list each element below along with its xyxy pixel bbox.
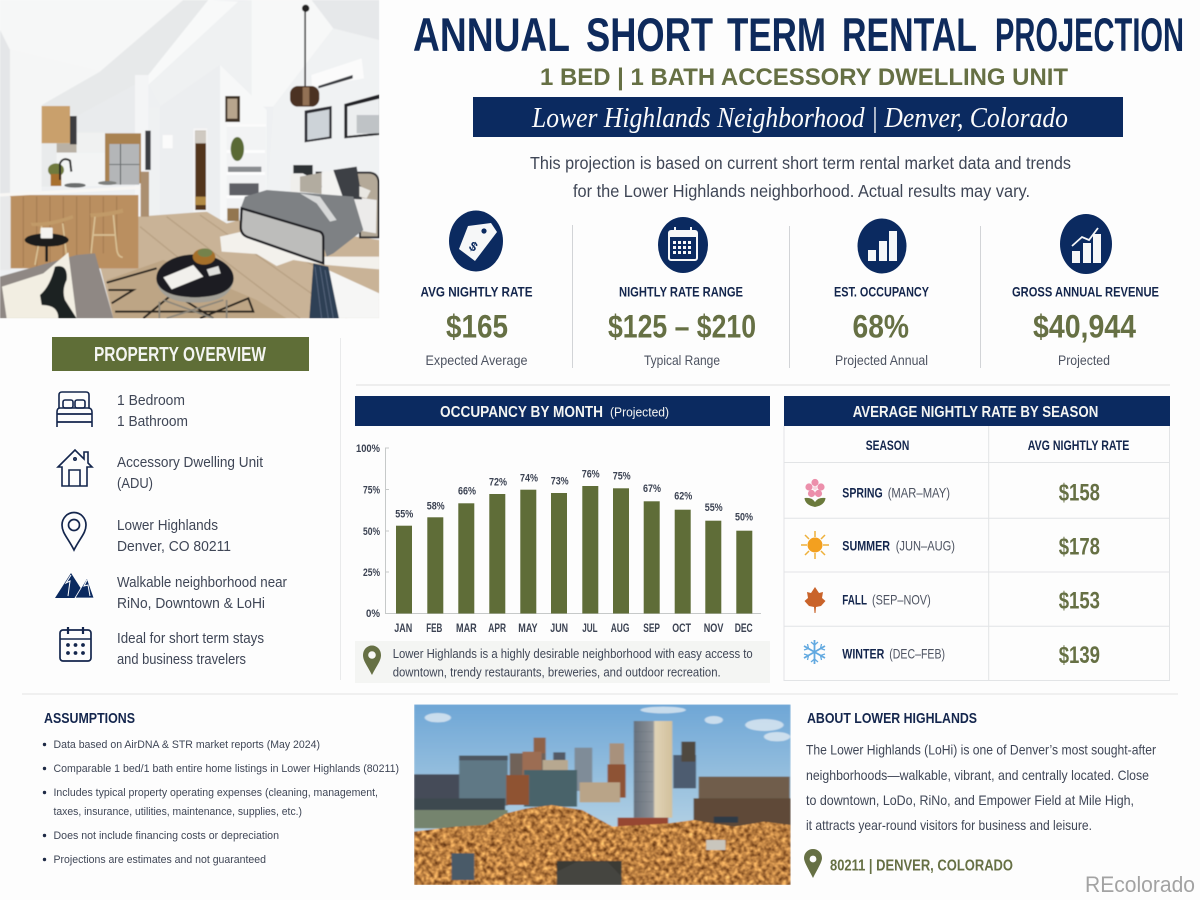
location banner: Lower Highlands Neighborhood | Denver, Colorado bbox=[531, 103, 1068, 134]
sofa and pillow bbox=[0, 253, 113, 318]
row: spring bbox=[804, 479, 1100, 507]
bar chart bbox=[356, 443, 761, 635]
bar chart: MAR bbox=[456, 621, 477, 635]
intro text bbox=[530, 153, 1071, 201]
panel: about lower highlands bbox=[804, 710, 1156, 878]
stat: nightly rate range bbox=[608, 217, 756, 368]
stat: estimated occupancy: 68% bbox=[852, 308, 909, 344]
icon: calendar bbox=[60, 627, 91, 661]
row: winter: WINTER bbox=[842, 645, 884, 661]
icon: location pin bbox=[62, 512, 86, 550]
title bbox=[413, 8, 1184, 61]
armchair bbox=[328, 270, 379, 318]
text: location: Denver, CO 80211 bbox=[117, 539, 231, 555]
stat: gross annual revenue: $40,944 bbox=[1033, 308, 1136, 344]
row: fall: FALL bbox=[842, 592, 867, 608]
bar chart: 72% bbox=[489, 476, 507, 488]
assumptions list: taxes, insurance, utilities, maintenance, supplies, etc.) bbox=[54, 806, 302, 818]
bar chart: 55% bbox=[705, 502, 723, 514]
bar chart: APR bbox=[488, 621, 506, 635]
bar chart: 75% bbox=[613, 471, 631, 483]
watermark: REcolorado bbox=[1085, 872, 1195, 897]
intro text: This projection is based on current short term rental market data and trends bbox=[530, 153, 1071, 173]
text: bedrooms: 1 Bedroom bbox=[117, 393, 185, 409]
title: ANNUAL bbox=[413, 8, 570, 61]
heading: property overview bbox=[52, 337, 309, 371]
bar chart: SEP bbox=[643, 621, 660, 635]
location banner bbox=[473, 97, 1123, 137]
assumptions list: Comparable 1 bed/1 bath entire home listings in Lower Highlands (80211) bbox=[54, 763, 399, 775]
row: spring: $158 bbox=[1059, 480, 1100, 507]
bar chart: AUG bbox=[611, 621, 629, 635]
callout: neighborhood note bbox=[355, 641, 770, 683]
autumn trees bbox=[414, 805, 791, 885]
stat: estimated occupancy bbox=[834, 218, 930, 368]
bar chart: JUN bbox=[550, 621, 568, 635]
panel: assumptions bbox=[43, 710, 399, 866]
row: summer bbox=[801, 531, 1100, 561]
counter bbox=[10, 195, 138, 268]
row: winter: $139 bbox=[1059, 642, 1100, 669]
icon: flower bbox=[804, 479, 826, 507]
text: location: Lower Highlands bbox=[117, 518, 218, 534]
stat: average nightly rate: AVG NIGHTLY RATE bbox=[420, 284, 532, 300]
about text: The Lower Highlands (LoHi) is one of Denver’s most sought-after bbox=[806, 742, 1156, 758]
icon: leaf bbox=[804, 587, 826, 613]
bar chart: 76% bbox=[582, 469, 600, 481]
assumptions list: Data based on AirDNA & STR market reports (May 2024) bbox=[54, 739, 320, 751]
text: walkability bbox=[117, 575, 287, 612]
bar chart: 58% bbox=[427, 500, 445, 512]
stat: average nightly rate: Expected Average bbox=[426, 352, 528, 368]
stat: average nightly rate bbox=[420, 210, 532, 368]
text: bedrooms bbox=[117, 393, 188, 430]
stat: average nightly rate: $165 bbox=[446, 308, 508, 344]
bar chart: 25% bbox=[363, 567, 380, 579]
text: bedrooms: 1 Bathroom bbox=[117, 414, 188, 430]
pendant lamp bbox=[304, 7, 306, 87]
icon: bar chart bbox=[858, 218, 906, 274]
bar chart: 50% bbox=[363, 526, 380, 538]
callout: neighborhood note: downtown, trendy restaurants, breweries, and outdoor recreation. bbox=[393, 666, 721, 680]
kitchen bbox=[42, 106, 70, 143]
bar chart: 75% bbox=[363, 484, 380, 496]
assumptions list bbox=[43, 739, 399, 866]
bar chart: 67% bbox=[643, 483, 661, 495]
heading: occupancy by month: (Projected) bbox=[610, 404, 669, 420]
heading: property overview: PROPERTY OVERVIEW bbox=[94, 344, 266, 366]
photo: apartment interior bbox=[0, 0, 379, 318]
callout: neighborhood note: Lower Highlands is a highly desirable neighborhood with easy access to bbox=[393, 647, 753, 661]
bar chart: MAY bbox=[518, 621, 538, 635]
row: spring: SPRING bbox=[842, 484, 883, 500]
icon: price tag bbox=[449, 210, 503, 272]
built-in shelves bbox=[225, 96, 240, 122]
stat: nightly rate range: NIGHTLY RATE RANGE bbox=[619, 284, 743, 300]
assumptions list: Projections are estimates and not guaranteed bbox=[54, 854, 266, 866]
rug bbox=[107, 260, 287, 318]
title: TERM bbox=[727, 8, 826, 61]
text: walkability: RiNo, Downtown & LoHi bbox=[117, 596, 265, 612]
coffee table bbox=[159, 300, 227, 318]
bar chart: FEB bbox=[426, 621, 443, 635]
icon: price tag: $ bbox=[466, 238, 481, 255]
bed bbox=[317, 173, 379, 237]
row: winter: (DEC–FEB) bbox=[889, 645, 945, 661]
stat: gross annual revenue: Projected bbox=[1058, 352, 1110, 368]
heading: rate by season: AVERAGE NIGHTLY RATE BY SEASON bbox=[853, 404, 1098, 421]
bar chart: 0% bbox=[366, 608, 380, 620]
text: walkability: Walkable neighborhood near bbox=[117, 575, 287, 591]
icon: sun bbox=[801, 531, 829, 559]
row: spring: (MAR–MAY) bbox=[888, 484, 950, 500]
panel: average nightly rate by season bbox=[784, 396, 1170, 680]
bar chart: 74% bbox=[520, 472, 538, 484]
icon: calendar bbox=[658, 217, 708, 273]
table header bbox=[866, 437, 1129, 453]
windows and AC bbox=[311, 58, 364, 87]
heading: about: ABOUT LOWER HIGHLANDS bbox=[807, 710, 977, 727]
door bbox=[194, 129, 206, 212]
heading: occupancy by month: OCCUPANCY BY MONTH bbox=[440, 404, 603, 421]
icon: snowflake bbox=[804, 640, 825, 664]
bar chart: 66% bbox=[458, 486, 476, 498]
about text: it attracts year-round visitors for business and leisure. bbox=[806, 817, 1092, 833]
row: fall bbox=[804, 587, 1100, 615]
title: RENTAL bbox=[842, 8, 977, 61]
assumptions list: Does not include financing costs or depreciation bbox=[54, 830, 279, 842]
subtitle: 1 BED | 1 BATH ACCESSORY DWELLING UNIT bbox=[540, 64, 1068, 91]
assumptions list: Includes typical property operating expenses (cleaning, management, bbox=[54, 787, 378, 799]
bar chart: JUL bbox=[582, 621, 598, 635]
stat: gross annual revenue bbox=[1012, 214, 1159, 368]
row: summer: (JUN–AUG) bbox=[896, 538, 955, 554]
icon: bed bbox=[57, 392, 92, 427]
bar chart: 50% bbox=[735, 512, 753, 524]
location tag: 80211 | DENVER, COLORADO bbox=[830, 858, 1013, 874]
stat: nightly rate range: Typical Range bbox=[644, 352, 720, 368]
photo: Denver skyline bbox=[414, 704, 791, 885]
text: unit type: Accessory Dwelling Unit bbox=[117, 455, 263, 471]
row: winter bbox=[804, 640, 1100, 669]
stat: estimated occupancy: Projected Annual bbox=[835, 352, 928, 368]
text: ideal guests: and business travelers bbox=[117, 652, 246, 668]
icon: mountains bbox=[55, 573, 94, 598]
heading: occupancy by month bbox=[355, 396, 770, 426]
table header: AVG NIGHTLY RATE bbox=[1028, 437, 1129, 453]
panel: occupancy by month bbox=[355, 396, 770, 683]
location tag bbox=[804, 849, 1013, 878]
bar chart: 100% bbox=[356, 443, 380, 455]
bar chart: OCT bbox=[672, 621, 691, 635]
bar chart: JAN bbox=[394, 621, 412, 635]
text: unit type bbox=[117, 455, 263, 492]
bar chart: 73% bbox=[551, 475, 569, 487]
bar chart: 62% bbox=[674, 491, 692, 503]
icon: house bbox=[58, 450, 92, 486]
text: ideal guests bbox=[117, 631, 264, 668]
row: fall: $153 bbox=[1059, 588, 1100, 615]
intro text: for the Lower Highlands neighborhood. Actual results may vary. bbox=[573, 181, 1030, 201]
heading: assumptions: ASSUMPTIONS bbox=[44, 710, 135, 727]
stat: estimated occupancy: EST. OCCUPANCY bbox=[834, 284, 930, 300]
stools and side table bbox=[31, 215, 73, 226]
panel: property overview bbox=[52, 337, 309, 668]
row: summer: $178 bbox=[1059, 534, 1100, 561]
table header: SEASON bbox=[866, 437, 909, 453]
stat: nightly rate range: $125 – $210 bbox=[608, 308, 756, 344]
row: summer: SUMMER bbox=[842, 538, 890, 554]
floor bbox=[97, 212, 379, 318]
stat: gross annual revenue: GROSS ANNUAL REVENUE bbox=[1012, 284, 1159, 300]
row: fall: (SEP–NOV) bbox=[872, 592, 931, 608]
about text: to downtown, LoDo, RiNo, and Empower Field at Mile High, bbox=[806, 792, 1134, 808]
text: location bbox=[117, 518, 231, 555]
heading: rate by season bbox=[784, 396, 1170, 426]
title: SHORT bbox=[586, 8, 713, 61]
about text: neighborhoods—walkable, vibrant, and centrally located. Close bbox=[806, 767, 1149, 783]
icon: growth chart bbox=[1060, 214, 1112, 274]
bar chart: DEC bbox=[735, 621, 753, 635]
about text bbox=[806, 742, 1156, 833]
bar chart: NOV bbox=[704, 621, 723, 635]
bar chart: 55% bbox=[395, 509, 413, 521]
text: unit type: (ADU) bbox=[117, 476, 153, 492]
text: ideal guests: Ideal for short term stays bbox=[117, 631, 264, 647]
